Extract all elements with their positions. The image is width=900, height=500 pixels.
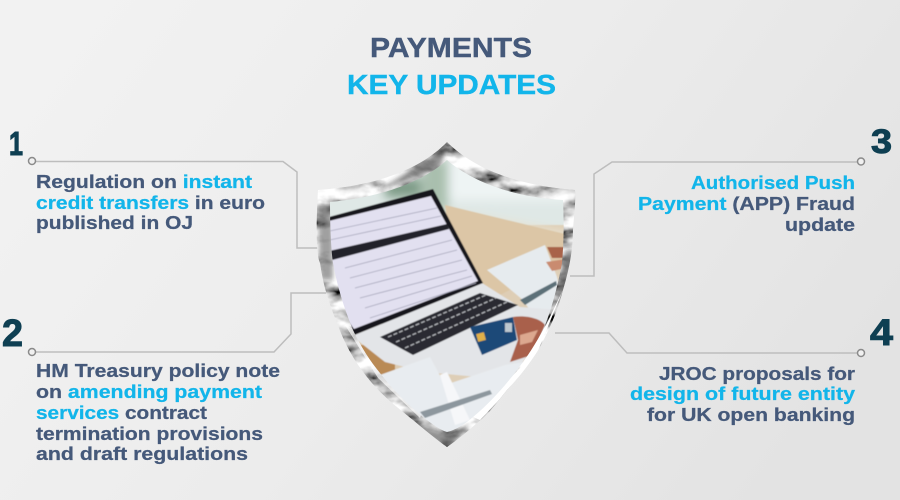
paper at right (487, 244, 558, 310)
fingers (547, 247, 566, 258)
item 3 number: 3 (871, 123, 892, 161)
item 3 text: Payment (APP) Fraud (638, 193, 855, 214)
item 2 text (36, 360, 280, 464)
hand holding card (510, 316, 545, 362)
screen rows (325, 208, 476, 318)
item 4 text: for UK open banking (647, 404, 855, 425)
photo backdrop (358, 224, 564, 383)
item 3 text: Authorised Push (691, 172, 855, 193)
item 4 text (630, 363, 856, 425)
item 1 number: 1 (9, 125, 23, 162)
shield foil border (310, 135, 580, 455)
item 4 text: design of future entity (630, 383, 856, 404)
item 2 text: HM Treasury policy note (36, 360, 280, 381)
item 4 text: JROC proposals for (659, 363, 855, 384)
screen divider band (325, 224, 449, 262)
connector: item 4 (555, 333, 864, 356)
item 1 text: credit transfers in euro (36, 192, 265, 213)
item 2 text: and draft regulations (36, 443, 248, 464)
item 4 number: 4 (870, 312, 893, 353)
item 1 text: published in OJ (36, 212, 193, 233)
documents in foreground (380, 362, 523, 432)
title: KEY UPDATES (347, 69, 556, 100)
shield photo (325, 155, 570, 440)
title: PAYMENTS (370, 32, 532, 63)
item 2 text: services contract (36, 402, 207, 423)
item 2 number: 2 (2, 313, 23, 355)
connector: item 1 (28, 158, 322, 248)
connector: item 3 (570, 158, 864, 276)
item 3 text (638, 172, 855, 235)
connector: item 2 (28, 293, 326, 356)
shield with photo (310, 135, 580, 455)
title (347, 32, 556, 100)
credit card (470, 317, 517, 355)
item 2 text: termination provisions (36, 423, 263, 444)
item 1 text: Regulation on instant (36, 171, 252, 192)
laptop screen (325, 196, 478, 329)
item 2 text: on amending payment (36, 381, 262, 402)
keyboard (380, 293, 518, 355)
item 1 text (36, 171, 265, 233)
item 3 text: update (785, 214, 855, 235)
laptop lid (325, 189, 483, 336)
laptop base (352, 283, 560, 380)
